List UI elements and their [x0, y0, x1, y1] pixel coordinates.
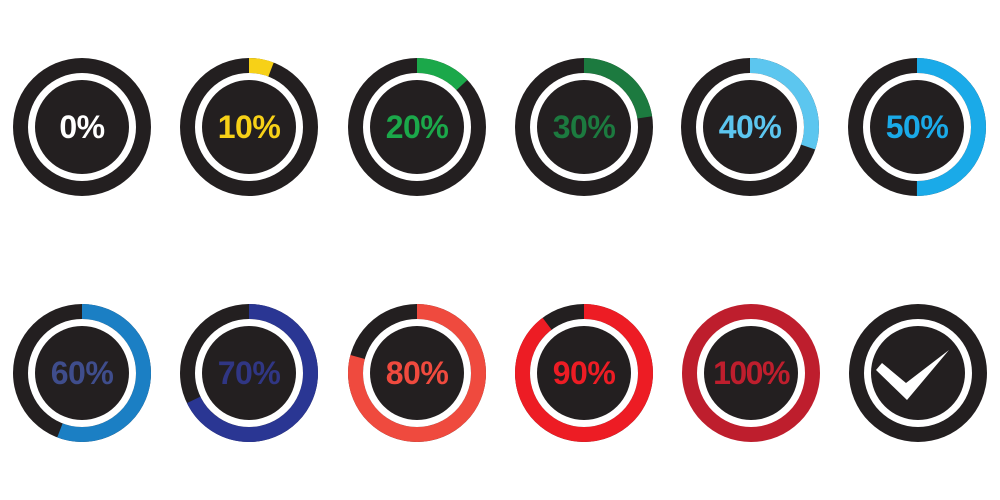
gauge: 30% — [515, 58, 653, 196]
gauge: 50%: 50% — [886, 109, 948, 145]
gauge: 50% — [848, 58, 986, 196]
gauge: 40% — [681, 58, 819, 196]
gauge: 20% — [348, 58, 486, 196]
gauge: 100% — [682, 304, 820, 442]
gauge: 90% — [515, 304, 653, 442]
gauge: 70% — [180, 304, 318, 442]
gauge: 80%: 80% — [386, 355, 448, 391]
gauge: 80% — [348, 304, 486, 442]
icon: check complete — [849, 304, 987, 442]
gauge: 10% — [180, 58, 318, 196]
gauge: 60%: 60% — [51, 355, 113, 391]
gauge: 0%: 0% — [59, 109, 105, 145]
gauge: 60% — [13, 304, 151, 442]
gauge: 70%: 70% — [218, 355, 280, 391]
gauge: 100%: 100% — [713, 355, 790, 391]
gauge: 10%: 10% — [218, 109, 280, 145]
gauge: 30%: 30% — [553, 109, 615, 145]
gauge: 0% — [13, 58, 151, 196]
gauge: 90%: 90% — [553, 355, 615, 391]
gauge: 40%: 40% — [719, 109, 781, 145]
gauge: 20%: 20% — [386, 109, 448, 145]
